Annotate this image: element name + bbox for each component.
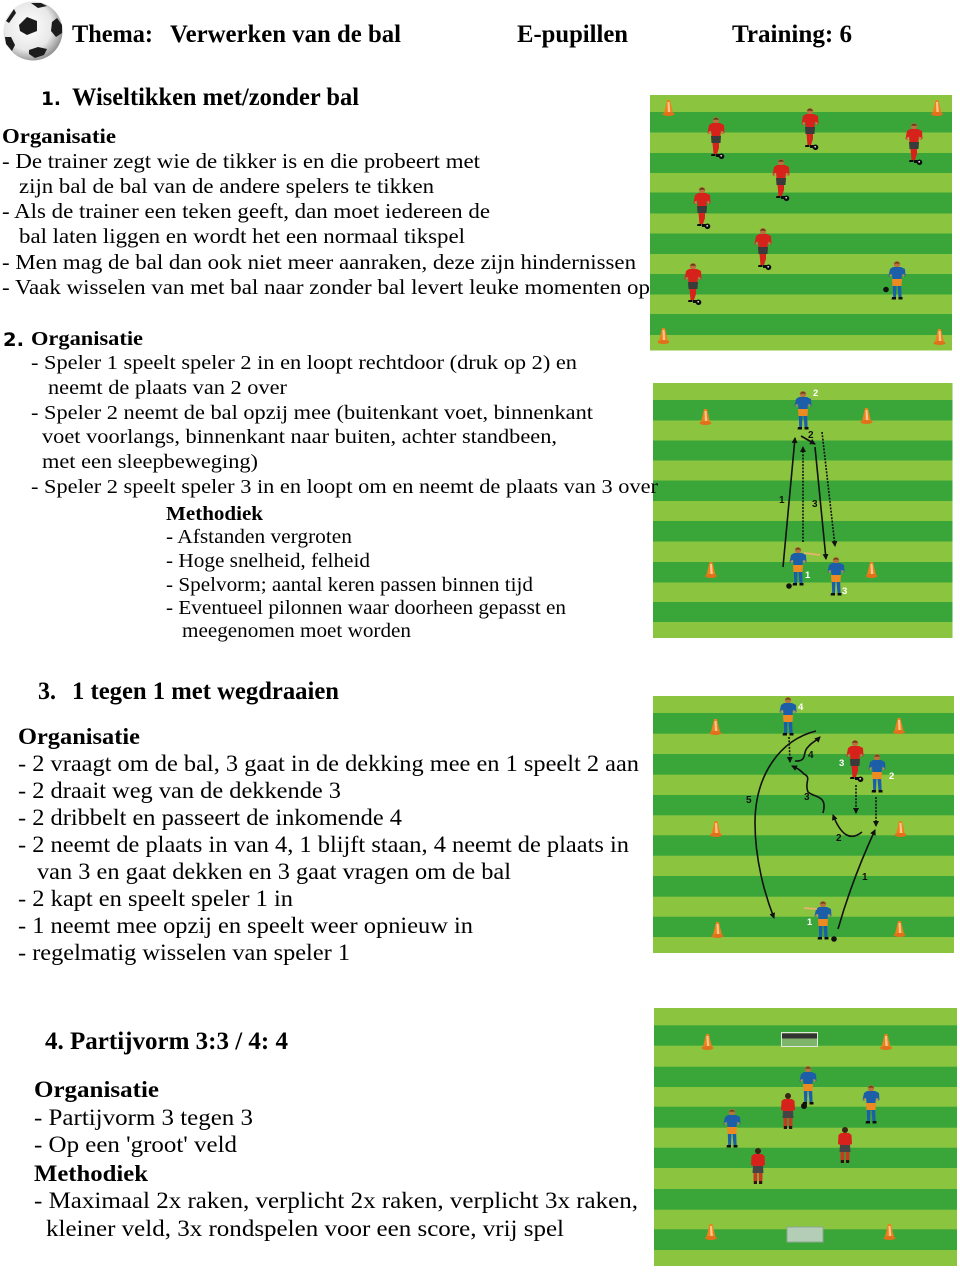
section 1 body: - De trainer zegt wie de tikker is en die probeert met xyxy=(2,149,480,173)
section 3 text xyxy=(18,678,639,966)
arrows xyxy=(755,731,876,929)
section 3 body: - 2 draait weg van de dekkende 3 xyxy=(18,778,341,804)
section 3 heading: 1 tegen 1 met wegdraaien xyxy=(72,678,339,705)
section 2 body xyxy=(31,328,658,498)
section 3 heading: 3. xyxy=(38,678,56,705)
section 3 body xyxy=(18,724,639,966)
section 2 body: - Speler 2 neemt de bal opzij mee (buitenkant voet, binnenkant xyxy=(31,402,593,424)
header line xyxy=(72,21,852,48)
section 2 methodiek: - Eventueel pilonnen waar doorheen gepasst en xyxy=(166,598,566,619)
section 2 text xyxy=(3,328,658,642)
diagram 2: passing field xyxy=(653,383,952,638)
number labels: 2 xyxy=(813,388,818,399)
number labels: 1 xyxy=(862,872,868,883)
section 3 body: - 2 neemt de plaats in van 4, 1 blijft staan, 4 neemt de plaats in xyxy=(18,832,629,858)
number labels: 1 xyxy=(807,917,813,928)
section 4 body: - Op een 'groot' veld xyxy=(34,1132,237,1158)
cones xyxy=(700,408,878,578)
section 1 body xyxy=(2,124,650,299)
number labels xyxy=(779,388,847,597)
goal bottom xyxy=(787,1227,823,1242)
section 4 body xyxy=(34,1077,638,1242)
section 1 body: - Vaak wisselen van met bal naar zonder bal levert leuke momenten op xyxy=(2,275,650,299)
header line: Verwerken van de bal xyxy=(170,21,401,48)
cones xyxy=(710,718,906,938)
number labels: 2 xyxy=(836,833,842,844)
goal top xyxy=(782,1032,818,1046)
section 3 body: - 2 vraagt om de bal, 3 gaat in de dekking mee en 1 speelt 2 aan xyxy=(18,751,639,777)
section 2 body: neemt de plaats van 2 over xyxy=(48,377,287,399)
section 3 body: van 3 en gaat dekken en 3 gaat vragen om de bal xyxy=(37,859,511,885)
players with balls xyxy=(684,108,922,305)
players xyxy=(786,391,844,596)
diagram 4: partijvorm field xyxy=(654,1008,957,1266)
number labels: 4 xyxy=(798,702,804,713)
arrows xyxy=(783,432,835,567)
section 4 body: - Partijvorm 3 tegen 3 xyxy=(34,1105,253,1131)
section 4 body: Methodiek xyxy=(34,1161,149,1187)
section 1 body: - Men mag de bal dan ook niet meer aanraken, deze zijn hindernissen xyxy=(2,250,637,274)
section 2 number: 2. xyxy=(3,329,24,351)
icon: football xyxy=(4,2,62,60)
section 4 body: kleiner veld, 3x rondspelen voor een score, vrij spel xyxy=(46,1216,564,1242)
section 4 heading: 4. Partijvorm 3:3 / 4: 4 xyxy=(45,1028,288,1055)
number labels: 5 xyxy=(746,795,752,806)
section 1 body: bal laten liggen en wordt het een normaal tikspel xyxy=(19,224,465,248)
section 1 text xyxy=(2,84,650,299)
section 2 methodiek: - Afstanden vergroten xyxy=(166,527,352,548)
section 4 text xyxy=(34,1028,638,1242)
section 2 methodiek: Methodiek xyxy=(166,504,263,525)
section 2 body: Organisatie xyxy=(31,328,143,350)
header line: Training: 6 xyxy=(732,21,852,48)
number labels: 1 xyxy=(779,495,785,506)
cones xyxy=(702,1034,896,1240)
number labels: 2 xyxy=(808,430,814,441)
section 2 methodiek xyxy=(166,504,566,642)
number labels: 3 xyxy=(842,586,847,597)
section 4 body: - Maximaal 2x raken, verplicht 2x raken, verplicht 3x raken, xyxy=(34,1188,638,1214)
section 2 methodiek: - Spelvorm; aantal keren passen binnen tijd xyxy=(166,575,533,596)
number labels: 3 xyxy=(812,499,818,510)
section 2 methodiek: meegenomen moet worden xyxy=(182,621,411,642)
section 1 heading: Wiseltikken met/zonder bal xyxy=(72,84,359,111)
section 3 body: - regelmatig wisselen van speler 1 xyxy=(18,940,350,966)
number labels: 3 xyxy=(804,792,810,803)
section 2 body: - Speler 1 speelt speler 2 in en loopt rechtdoor (druk op 2) en xyxy=(31,352,577,374)
diagram 3: 1 tegen 1 field xyxy=(653,696,954,953)
number labels xyxy=(746,702,894,928)
number labels: 3 xyxy=(839,758,844,769)
section 1 heading: 1. xyxy=(41,88,61,110)
number labels: 1 xyxy=(805,570,811,581)
section 2 methodiek: - Hoge snelheid, felheid xyxy=(166,551,370,572)
header line: Thema: xyxy=(72,21,153,48)
players xyxy=(780,697,886,942)
header line: E-pupillen xyxy=(517,21,628,48)
section 2 body: met een sleepbeweging) xyxy=(42,451,258,473)
diagram 1: tikspel field xyxy=(650,95,952,350)
section 2 body: voet voorlangs, binnenkant naar buiten, achter standbeen, xyxy=(42,426,557,448)
section 3 body: Organisatie xyxy=(18,724,140,750)
section 3 body: - 1 neemt mee opzij en speelt weer opnieuw in xyxy=(18,913,473,939)
players xyxy=(724,1066,880,1184)
section 1 body: Organisatie xyxy=(2,124,116,148)
section 4 body: Organisatie xyxy=(34,1077,159,1103)
number labels: 2 xyxy=(889,771,894,782)
section 2 body: - Speler 2 speelt speler 3 in en loopt om en neemt de plaats van 3 over xyxy=(31,476,658,498)
number labels: 4 xyxy=(808,750,814,761)
section 3 body: - 2 dribbelt en passeert de inkomende 4 xyxy=(18,805,402,831)
cones xyxy=(658,100,946,345)
section 3 body: - 2 kapt en speelt speler 1 in xyxy=(18,886,293,912)
section 1 body: zijn bal de bal van de andere spelers te tikken xyxy=(19,174,435,198)
section 1 body: - Als de trainer een teken geeft, dan moet iedereen de xyxy=(2,199,490,223)
